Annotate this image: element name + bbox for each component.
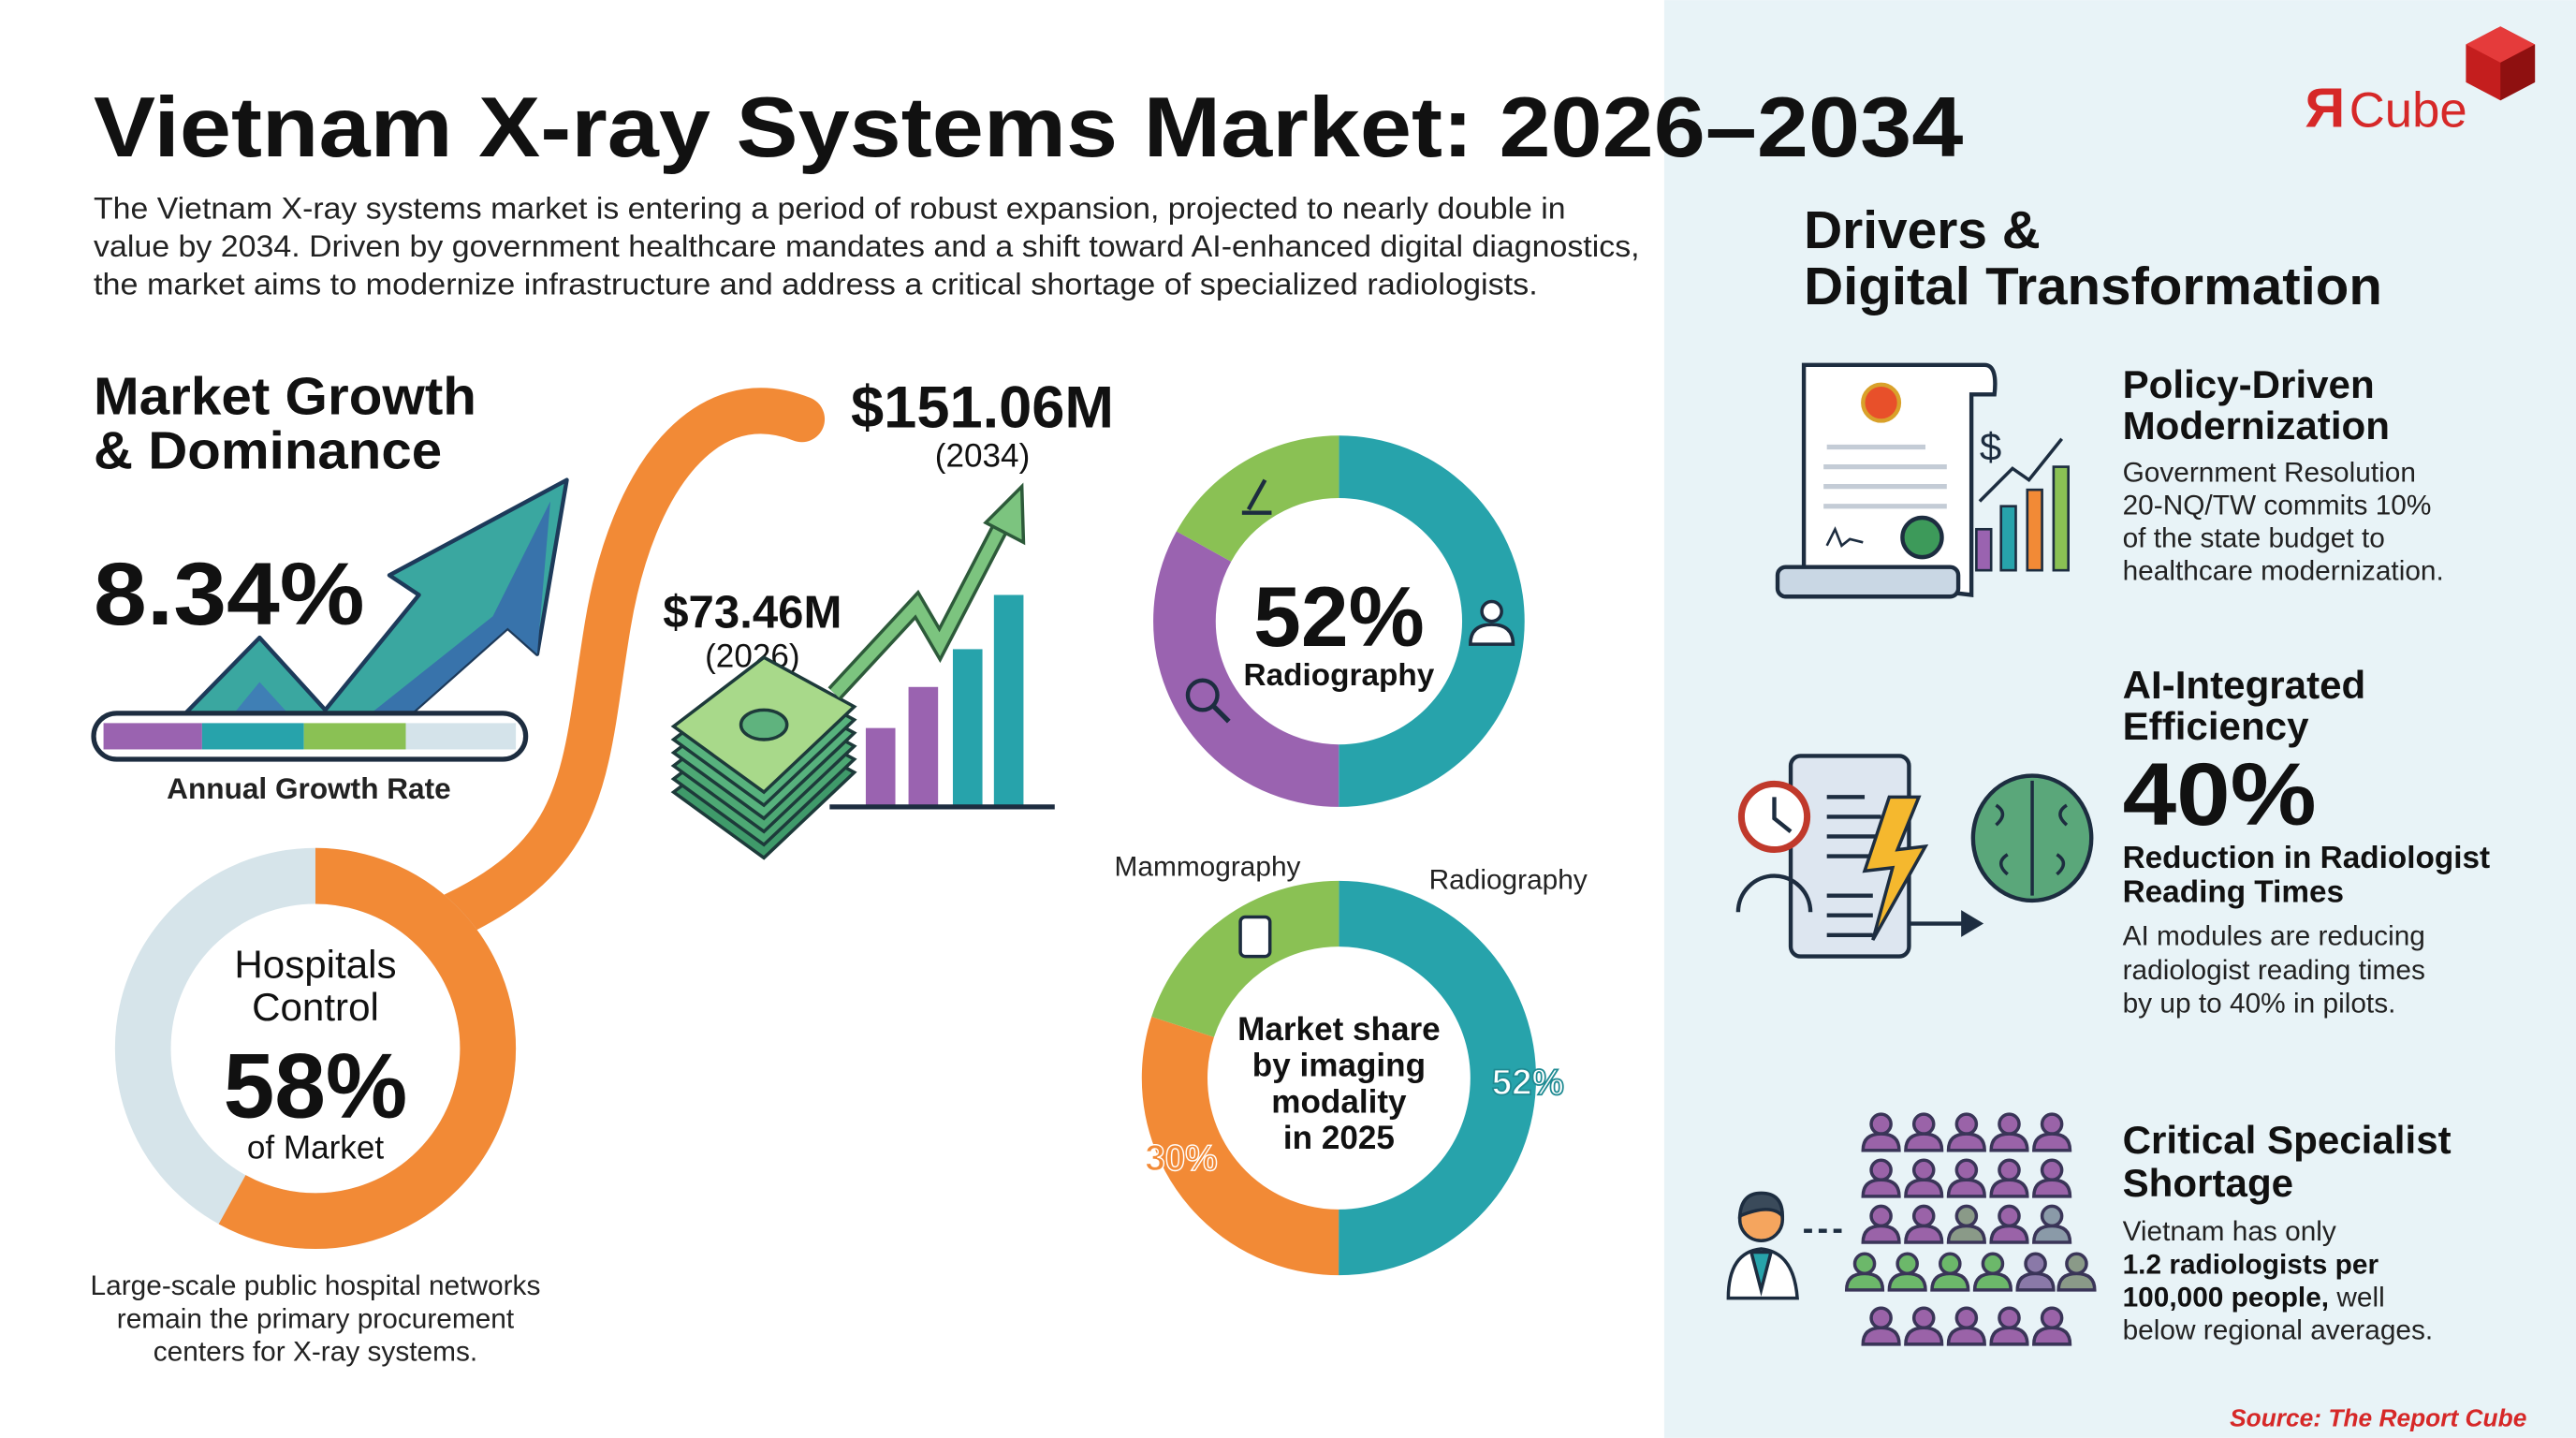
text: AI efficiency: by up to 40% in pilots.	[2123, 988, 2395, 1019]
donut: hospitals control: 58%	[224, 1034, 407, 1137]
CAGR value: 8.34%	[94, 545, 365, 644]
value 2026: $73.46M	[663, 588, 842, 638]
label: radiography: Radiography	[1429, 865, 1588, 896]
text: policy driven: 20-NQ/TW commits 10%	[2123, 490, 2431, 521]
value 2034	[851, 374, 1114, 475]
value 2034: $151.06M	[851, 374, 1114, 440]
text: specialist shortage	[2123, 1118, 2452, 1346]
donut: hospitals control: of Market	[247, 1129, 384, 1166]
text: specialist shortage: 100,000 people, well	[2123, 1282, 2385, 1313]
intro text: The Vietnam X-ray systems market is entering a period of robust expansion, projected to nearly double in	[94, 192, 1566, 226]
text: AI efficiency: radiologist reading times	[2123, 955, 2425, 986]
growth rate bar	[94, 713, 526, 759]
intro text	[94, 192, 1640, 301]
right panel background	[1664, 0, 2576, 1438]
text: policy driven: Government Resolution	[2123, 457, 2416, 488]
heading: drivers: Digital Transformation	[1804, 257, 2382, 315]
value 2026	[663, 588, 842, 675]
text: policy driven: healthcare modernization.	[2123, 556, 2444, 587]
icon: AI efficiency	[1738, 756, 2091, 957]
text: AI efficiency: Reduction in Radiologist	[2123, 841, 2490, 875]
heading: drivers: Drivers &	[1804, 200, 2041, 259]
donut: market share by modality: 30%	[1145, 1138, 1218, 1179]
value 2026: (2026)	[705, 638, 800, 675]
text: specialist shortage: 1.2 radiologists per	[2123, 1249, 2378, 1280]
icon: policy document: $	[1980, 425, 2001, 469]
text: policy driven: Modernization	[2123, 404, 2390, 448]
text: AI efficiency	[2123, 663, 2490, 1019]
source: Source: The Report Cube	[2230, 1404, 2526, 1432]
title: Vietnam X-ray Systems Market: 2026–2034	[94, 80, 1964, 175]
icon: doctor	[1728, 1193, 1848, 1299]
label: annual growth rate: Annual Growth Rate	[167, 771, 451, 805]
text: specialist shortage: Vietnam has only	[2123, 1216, 2336, 1247]
text: AI efficiency: Efficiency	[2123, 704, 2309, 748]
caption: hospitals: centers for X-ray systems.	[154, 1336, 477, 1367]
donut: market share by modality: Market share	[1237, 1011, 1441, 1048]
donut: hospitals control	[143, 876, 488, 1221]
logo: Cube	[2349, 82, 2467, 138]
text: policy driven: Policy-Driven	[2123, 362, 2375, 406]
donut: hospitals control: Hospitals	[234, 942, 397, 986]
text: AI efficiency: AI modules are reducing	[2123, 920, 2425, 951]
value 2034: (2034)	[935, 438, 1030, 475]
icon: people grid	[1847, 1114, 2095, 1344]
logo: Я	[2305, 76, 2345, 139]
heading: market growth	[94, 366, 476, 479]
text: specialist shortage: Shortage	[2123, 1161, 2293, 1205]
caption: hospitals: remain the primary procurement	[117, 1303, 515, 1334]
icon: money stack	[674, 657, 855, 858]
donut: market share by modality: 52%	[1492, 1063, 1564, 1103]
icon: policy document	[1778, 365, 2069, 596]
orange connector curve	[444, 411, 801, 920]
donut: market share by modality: modality	[1271, 1083, 1407, 1120]
text: specialist shortage: below regional averages.	[2123, 1315, 2433, 1346]
logo	[2305, 26, 2535, 139]
donut: market share by modality	[1145, 914, 1564, 1242]
icon: growth arrow	[181, 480, 567, 718]
heading: drivers	[1804, 200, 2382, 315]
donut: radiography share	[1184, 467, 1513, 776]
text: AI efficiency: Reading Times	[2123, 875, 2344, 910]
label: mammography: Mammography	[1115, 852, 1301, 883]
heading: market growth: & Dominance	[94, 420, 442, 479]
donut: radiography share: 52%	[1253, 569, 1425, 665]
donut: radiography share: Radiography	[1244, 658, 1435, 693]
text: AI efficiency: 40%	[2123, 745, 2317, 844]
donut: market share by modality: by imaging	[1252, 1048, 1426, 1084]
chart: revenue bars	[829, 487, 1055, 807]
text: policy driven: of the state budget to	[2123, 523, 2385, 554]
caption: hospitals	[91, 1270, 540, 1367]
text: AI efficiency: AI-Integrated	[2123, 663, 2365, 707]
heading: market growth: Market Growth	[94, 366, 476, 425]
donut: hospitals control: Control	[252, 985, 379, 1029]
text: policy driven	[2123, 362, 2444, 587]
caption: hospitals: Large-scale public hospital networks	[91, 1270, 540, 1301]
intro text: value by 2034. Driven by government healthcare mandates and a shift toward AI-enhanced digital diagnostics,	[94, 229, 1640, 263]
intro text: the market aims to modernize infrastructure and address a critical shortage of specialized radiologists.	[94, 267, 1538, 301]
text: specialist shortage: Critical Specialist	[2123, 1118, 2452, 1162]
donut: market share by modality: in 2025	[1283, 1120, 1395, 1156]
